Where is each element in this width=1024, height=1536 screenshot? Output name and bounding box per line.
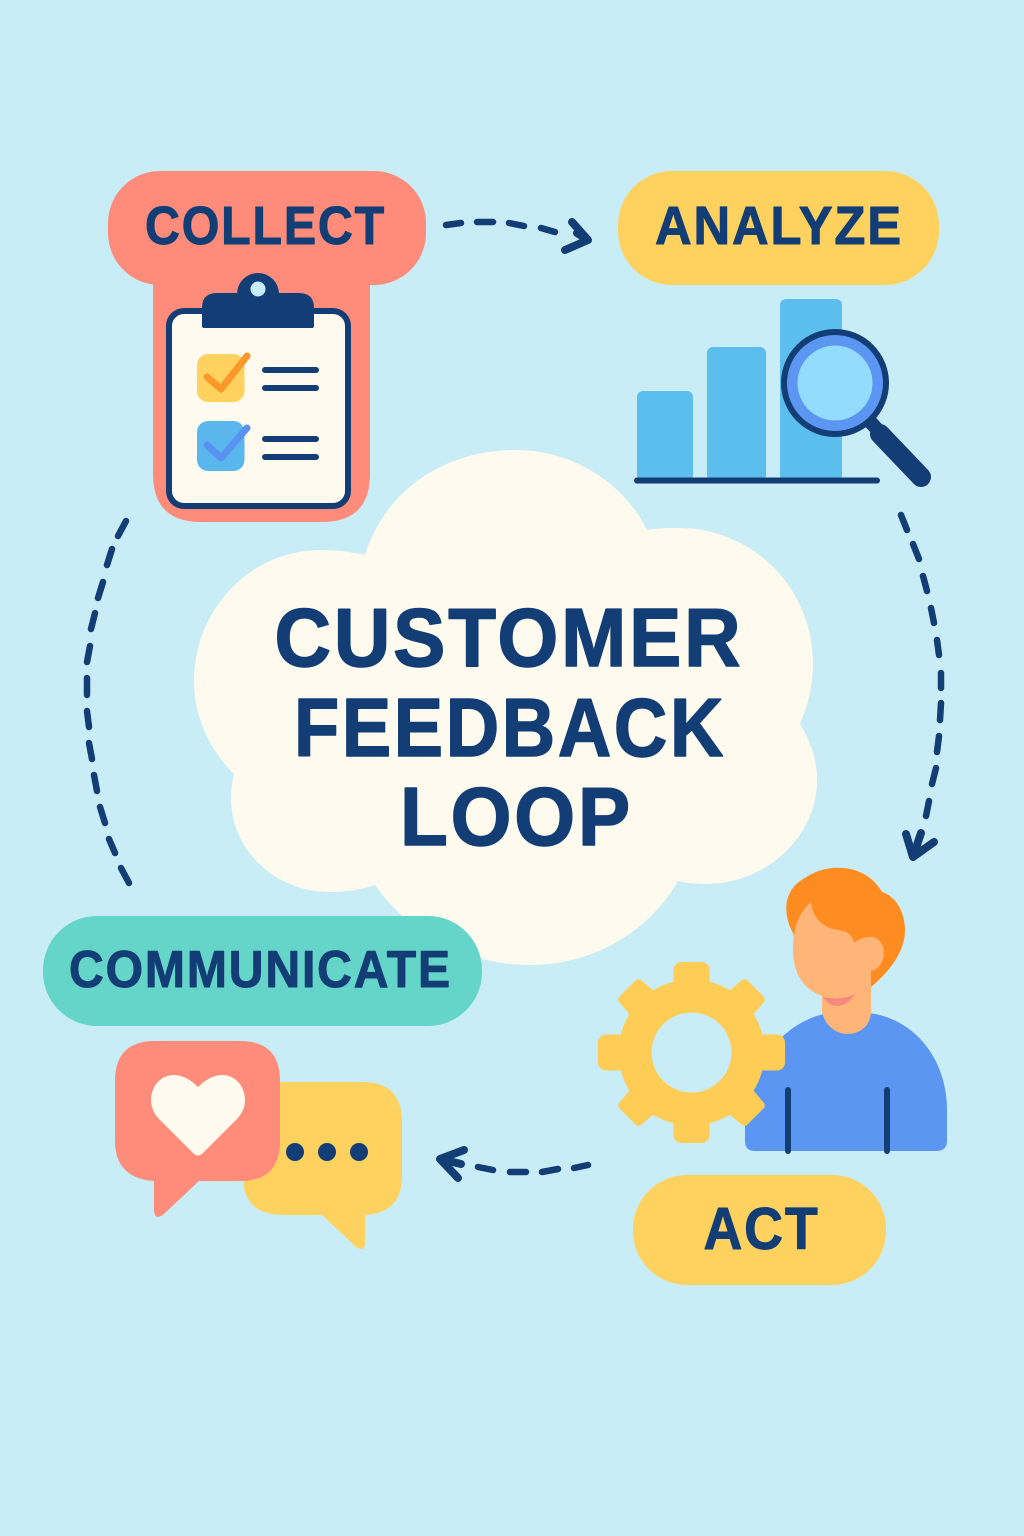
panel: central cloud <box>194 450 817 965</box>
communicate label: COMMUNICATE <box>69 941 452 999</box>
arrow: act to communicate <box>440 1150 588 1178</box>
icon: coral chat bubble with heart <box>115 1041 280 1217</box>
panel: collect <box>108 171 426 522</box>
icon: bar chart with magnifier <box>637 299 921 481</box>
icon: yellow chat bubble <box>243 1082 402 1249</box>
title: LOOP <box>400 770 633 863</box>
icon: person <box>745 868 947 1151</box>
panel: communicate <box>43 916 482 1249</box>
arrow: collect to analyze <box>446 222 588 250</box>
panel: act <box>598 868 947 1285</box>
collect label: COLLECT <box>145 196 386 256</box>
panel: analyze <box>618 171 939 481</box>
title: CUSTOMER <box>274 591 744 684</box>
title: FEEDBACK <box>294 681 726 774</box>
icon: clipboard with checklist <box>169 273 348 506</box>
icon: gear <box>598 962 785 1143</box>
title <box>274 591 744 863</box>
act label: ACT <box>704 1196 820 1262</box>
arrow: analyze to act <box>901 515 941 857</box>
arrow: communicate to collect <box>87 521 129 883</box>
analyze label: ANALYZE <box>655 196 903 256</box>
